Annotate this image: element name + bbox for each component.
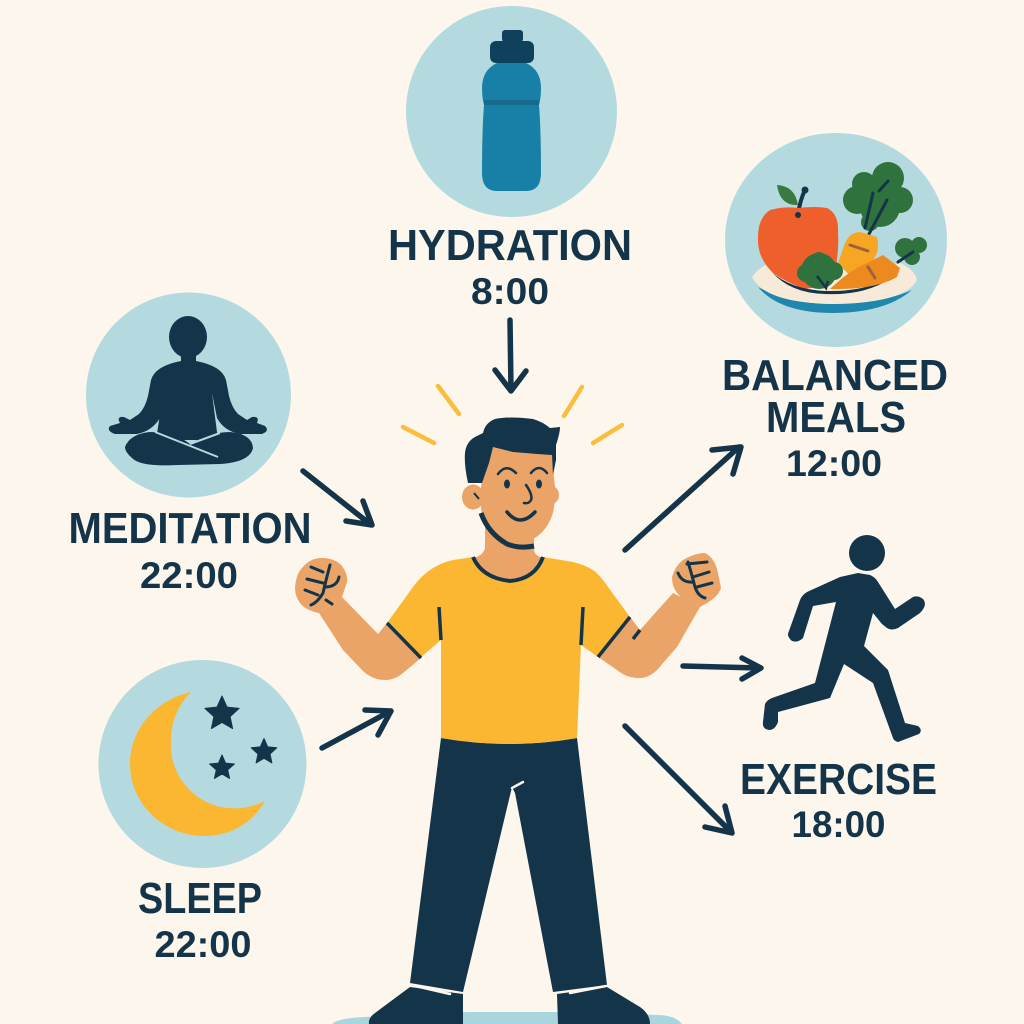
label: sleep: SLEEP xyxy=(138,874,262,923)
label: meditation: MEDITATION xyxy=(68,504,312,553)
arrow: meditation to person xyxy=(303,471,372,525)
ground platform xyxy=(332,1012,682,1024)
left arm xyxy=(319,597,421,680)
icon: balanced meals xyxy=(725,133,947,347)
icon: sleep moon and stars xyxy=(98,660,306,868)
arrow: sleep to person xyxy=(322,710,391,748)
icon: runner xyxy=(763,535,925,742)
label: hydration xyxy=(388,221,632,312)
trousers xyxy=(410,738,607,992)
label: exercise xyxy=(740,755,937,845)
neck xyxy=(473,515,543,590)
person: central figure xyxy=(295,418,721,1024)
label: sleep xyxy=(138,874,262,965)
facial features xyxy=(504,480,510,488)
shirt xyxy=(387,557,630,744)
label: balanced meals: MEALS xyxy=(766,393,906,442)
left fist xyxy=(295,558,347,613)
label: exercise: 18:00 xyxy=(792,804,886,845)
label: meditation: 22:00 xyxy=(140,555,238,596)
ears xyxy=(462,484,484,510)
label: exercise: EXERCISE xyxy=(740,755,937,804)
label: balanced meals xyxy=(722,351,948,484)
icon: meditation xyxy=(86,292,291,498)
arrow: person to lower right xyxy=(625,726,732,833)
arrow: hydration to person xyxy=(495,320,526,391)
arrow: person to balanced meals xyxy=(625,447,741,550)
hair xyxy=(465,418,560,483)
label: meditation xyxy=(68,504,312,596)
right fist xyxy=(672,553,721,607)
face xyxy=(481,445,556,543)
label: balanced meals: 12:00 xyxy=(786,443,882,484)
shoes xyxy=(369,987,463,1024)
icon: hydration bottle xyxy=(406,6,617,217)
label: hydration: HYDRATION xyxy=(388,221,632,270)
label: sleep: 22:00 xyxy=(154,924,252,965)
label: hydration: 8:00 xyxy=(471,271,549,312)
right arm xyxy=(598,593,700,678)
arrow: person to exercise xyxy=(683,658,761,679)
decoration: energy rays xyxy=(403,386,622,443)
label: balanced meals: BALANCED xyxy=(722,351,948,400)
